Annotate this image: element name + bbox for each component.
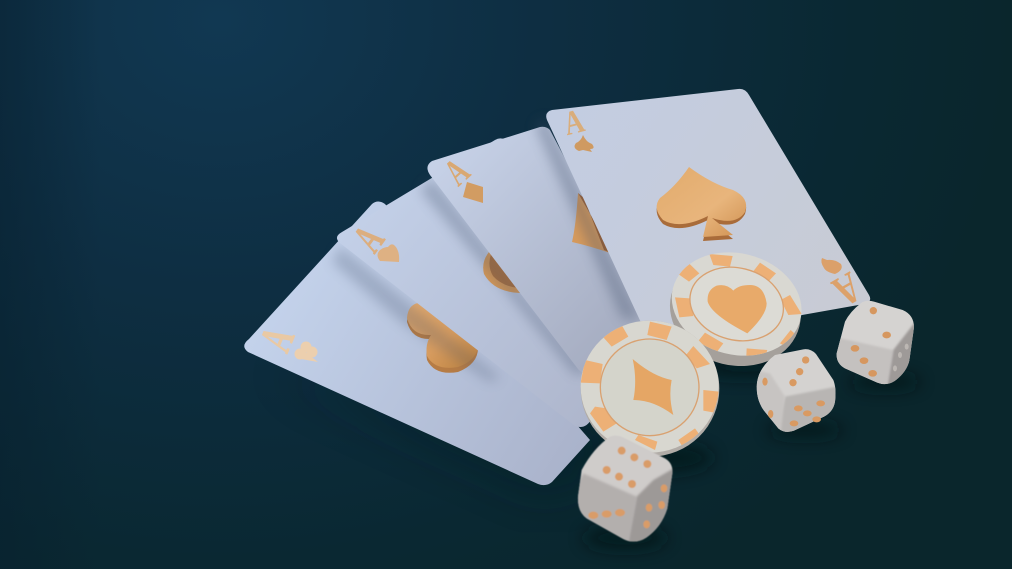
shadow under card fan: [270, 370, 600, 495]
icon: small diamond: [463, 182, 483, 203]
shadow of spades card on diamonds card: [535, 118, 640, 320]
icon: small heart: [378, 244, 399, 262]
shadow of diamonds card on hearts card: [420, 178, 590, 375]
label: A of clubs: A: [250, 320, 305, 359]
contact shadows under chips and dice: [583, 358, 921, 550]
icon: chip diamond: [633, 359, 673, 415]
card: ace of diamonds: [427, 127, 650, 373]
label: A top left: A: [560, 102, 588, 143]
card: ace of hearts: [337, 138, 640, 427]
icon: large club: [407, 303, 478, 373]
icon: small club: [294, 342, 318, 362]
label: A of diamonds: A: [436, 150, 479, 194]
chip: heart: [670, 252, 802, 366]
shadow of hearts card on clubs card: [332, 246, 500, 382]
icon: large heart: [483, 252, 530, 293]
icon: large diamond: [572, 193, 613, 254]
chip edge blocks: [581, 322, 719, 451]
card: ace of clubs: [244, 202, 590, 485]
chip: diamond: [581, 321, 719, 457]
icon: small spade: [575, 135, 594, 152]
chip edge blocks: [675, 254, 802, 363]
die: bottom six: [577, 436, 674, 542]
icon: large spade: [657, 167, 746, 241]
icon: chip heart: [708, 285, 767, 333]
label: A bottom right: A: [825, 262, 869, 315]
die: middle five: [756, 349, 836, 432]
die: right three: [836, 300, 914, 384]
card: ace of spades: [546, 89, 870, 342]
icon: small spade bottom: [821, 258, 842, 274]
label: A of hearts: A: [343, 217, 394, 260]
